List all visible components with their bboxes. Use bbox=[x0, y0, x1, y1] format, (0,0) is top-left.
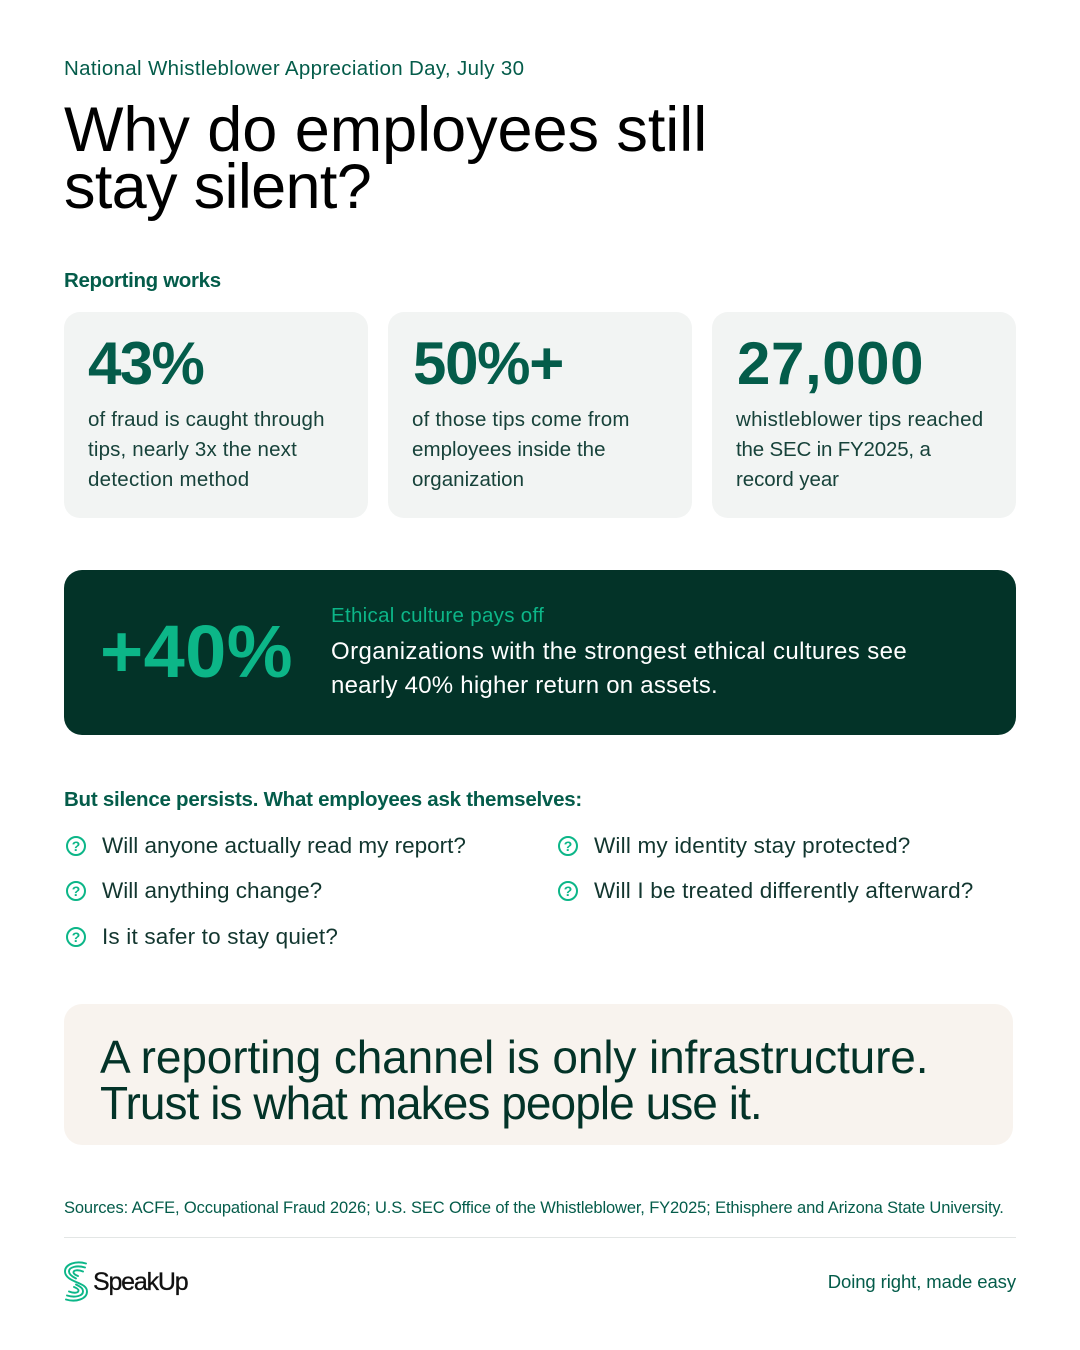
stat description bbox=[88, 408, 325, 491]
stat description bbox=[736, 408, 983, 491]
callout text: nearly 40% higher return on assets. bbox=[331, 672, 718, 699]
icon: question 2: ? bbox=[72, 883, 80, 899]
icon: question 5: ? bbox=[564, 883, 572, 899]
stat description: tips, nearly 3x the next bbox=[88, 438, 297, 461]
stat number: 27,000 bbox=[737, 330, 924, 397]
stat number: 50%+ bbox=[413, 330, 563, 397]
logo bbox=[64, 1261, 188, 1302]
tagline: Doing right, made easy bbox=[828, 1271, 1016, 1292]
stat description: of those tips come from bbox=[412, 408, 630, 431]
stat description: detection method bbox=[88, 468, 249, 491]
icon: question 2 bbox=[66, 881, 86, 901]
icon: question 3 bbox=[66, 927, 86, 947]
eyebrow: National Whistleblower Appreciation Day, July 30 bbox=[64, 57, 524, 80]
question 4: Will my identity stay protected? bbox=[594, 833, 911, 858]
panel: ethical culture bbox=[64, 570, 1016, 735]
title: Why do employees still bbox=[64, 95, 707, 165]
icon: question 4 bbox=[558, 836, 578, 856]
stat description: record year bbox=[736, 468, 839, 491]
panel: stat 43% bbox=[64, 312, 368, 518]
logo mark bbox=[64, 1261, 88, 1302]
stat description: whistleblower tips reached bbox=[736, 408, 983, 431]
title: stay silent? bbox=[64, 152, 371, 222]
statement text: A reporting channel is only infrastructure. bbox=[100, 1031, 928, 1083]
statement text bbox=[100, 1031, 928, 1129]
stat description: organization bbox=[412, 468, 524, 491]
stat description: of fraud is caught through bbox=[88, 408, 325, 431]
question 3: Is it safer to stay quiet? bbox=[102, 924, 338, 949]
stat description bbox=[412, 408, 630, 491]
question 5: Will I be treated differently afterward? bbox=[594, 878, 973, 903]
panel: stat 50%+ bbox=[388, 312, 692, 518]
stat description: the SEC in FY2025, a bbox=[736, 438, 931, 461]
section heading: silence persists: But silence persists. What employees ask themselves: bbox=[64, 788, 582, 811]
callout text bbox=[331, 638, 907, 699]
stat number: 43% bbox=[88, 330, 203, 397]
callout text: Organizations with the strongest ethical cultures see bbox=[331, 638, 907, 665]
title bbox=[64, 95, 707, 222]
big stat: +40% bbox=[100, 610, 293, 693]
wordmark: SpeakUp bbox=[93, 1268, 187, 1296]
question 1: Will anyone actually read my report? bbox=[102, 833, 466, 858]
icon: question 1 bbox=[66, 836, 86, 856]
panel: stat 27,000 bbox=[712, 312, 1016, 518]
section heading: reporting works: Reporting works bbox=[64, 269, 221, 292]
icon: question 1: ? bbox=[72, 838, 80, 854]
icon: question 5 bbox=[558, 881, 578, 901]
callout heading: Ethical culture pays off bbox=[331, 604, 544, 627]
sources: Sources: ACFE, Occupational Fraud 2026; U.S. SEC Office of the Whistleblower, FY2025; Ethisphere and Arizona State University. bbox=[64, 1199, 1004, 1217]
panel: closing statement bbox=[64, 1004, 1013, 1145]
statement text: Trust is what makes people use it. bbox=[100, 1077, 762, 1129]
icon: question 3: ? bbox=[72, 929, 80, 945]
question 2: Will anything change? bbox=[102, 878, 322, 903]
stat description: employees inside the bbox=[412, 438, 606, 461]
icon: question 4: ? bbox=[564, 838, 572, 854]
